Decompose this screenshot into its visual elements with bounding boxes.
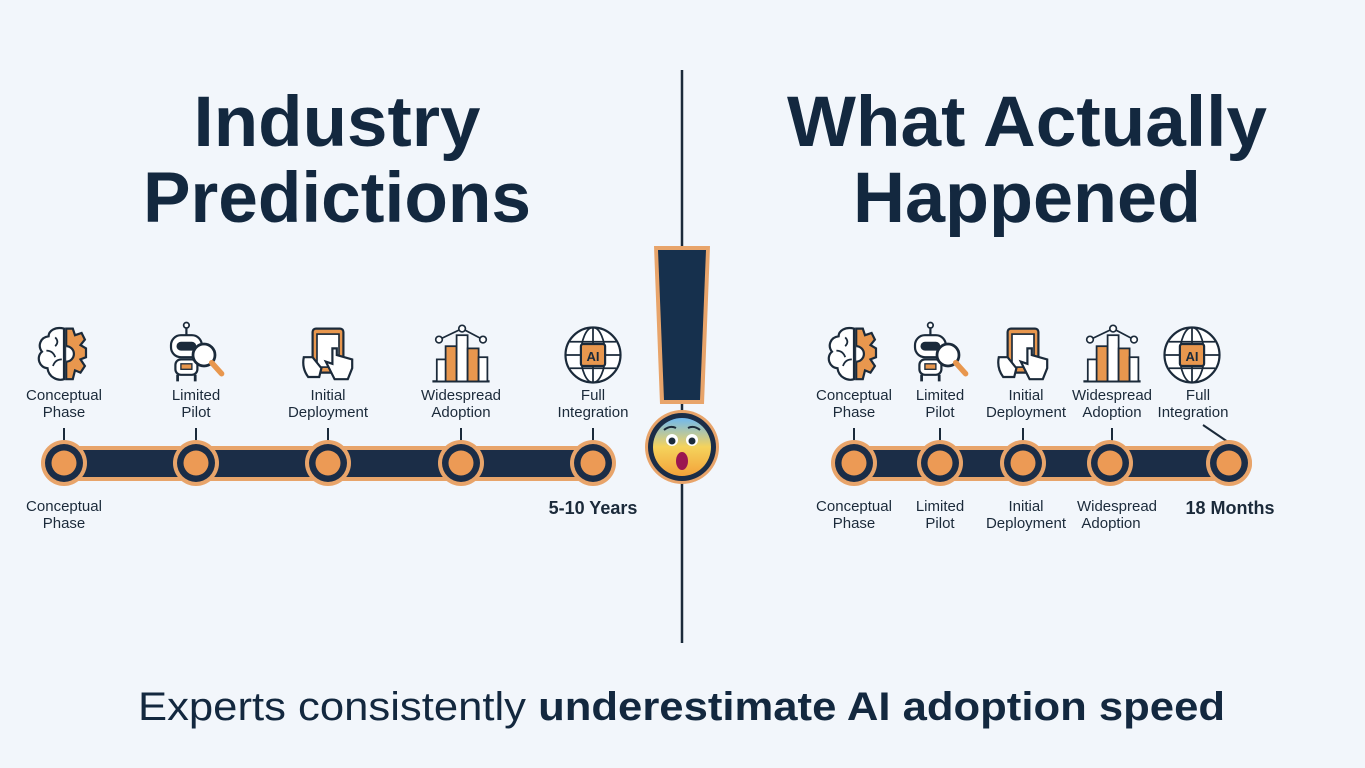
stage labels left: Full bbox=[581, 387, 605, 404]
panel: what actually happened timeline bbox=[816, 323, 1275, 532]
timeline bar left bbox=[41, 440, 616, 486]
icons right bbox=[829, 323, 1220, 382]
bottom labels right: Deployment bbox=[986, 515, 1067, 532]
stage labels left: Deployment bbox=[288, 404, 369, 421]
bottom labels right: Adoption bbox=[1081, 515, 1141, 532]
title: industry predictions: Predictions bbox=[143, 159, 531, 238]
bottom labels right: Phase bbox=[833, 515, 875, 532]
bottom labels left: 5-10 Years bbox=[549, 498, 637, 518]
stage labels left: Limited bbox=[172, 387, 220, 404]
icons left: AI bbox=[586, 349, 600, 364]
divider line bbox=[681, 70, 683, 643]
bottom labels left: Phase bbox=[43, 515, 85, 532]
bottom labels right: Widespread bbox=[1077, 498, 1157, 515]
caption: Experts consistently underestimate AI adoption speed bbox=[138, 685, 1225, 729]
stage labels left: Integration bbox=[558, 404, 628, 421]
title: what actually happened: What Actually bbox=[787, 83, 1268, 162]
stage labels right: Adoption bbox=[1082, 404, 1142, 421]
stage labels right: Integration bbox=[1158, 404, 1228, 421]
stage labels left: Phase bbox=[43, 404, 85, 421]
icons left bbox=[39, 323, 620, 382]
bottom labels left: Conceptual bbox=[26, 498, 102, 515]
stage labels right bbox=[816, 387, 1228, 421]
title: industry predictions: Industry bbox=[194, 83, 481, 162]
timeline bar right bbox=[831, 440, 1252, 486]
stage labels left bbox=[26, 387, 628, 421]
icons right: AI bbox=[1186, 349, 1198, 364]
stage labels right: Pilot bbox=[925, 404, 955, 421]
bottom labels right: Limited bbox=[916, 498, 964, 515]
stage labels left: Widespread bbox=[421, 387, 501, 404]
stage labels left: Pilot bbox=[181, 404, 211, 421]
title: what actually happened bbox=[787, 83, 1268, 238]
bottom labels right: Initial bbox=[1008, 498, 1044, 515]
icon: exclamation mark with shocked face bbox=[645, 246, 719, 484]
title: what actually happened: Happened bbox=[853, 159, 1201, 238]
bottom labels left bbox=[26, 498, 637, 532]
panel: industry predictions timeline bbox=[26, 323, 637, 532]
stage labels right: Widespread bbox=[1072, 387, 1152, 404]
stage labels left: Conceptual bbox=[26, 387, 102, 404]
bottom labels right bbox=[816, 498, 1275, 532]
title: industry predictions bbox=[143, 83, 531, 238]
stage labels right: Phase bbox=[833, 404, 875, 421]
stage labels left: Adoption bbox=[431, 404, 491, 421]
stage labels right: Deployment bbox=[986, 404, 1067, 421]
bottom labels right: 18 Months bbox=[1185, 498, 1275, 518]
stage labels right: Conceptual bbox=[816, 387, 892, 404]
stage labels right: Full bbox=[1186, 387, 1210, 404]
stage labels right: Limited bbox=[916, 387, 964, 404]
stage labels left: Initial bbox=[310, 387, 346, 404]
bottom labels right: Pilot bbox=[925, 515, 955, 532]
bottom labels right: Conceptual bbox=[816, 498, 892, 515]
stage labels right: Initial bbox=[1008, 387, 1044, 404]
